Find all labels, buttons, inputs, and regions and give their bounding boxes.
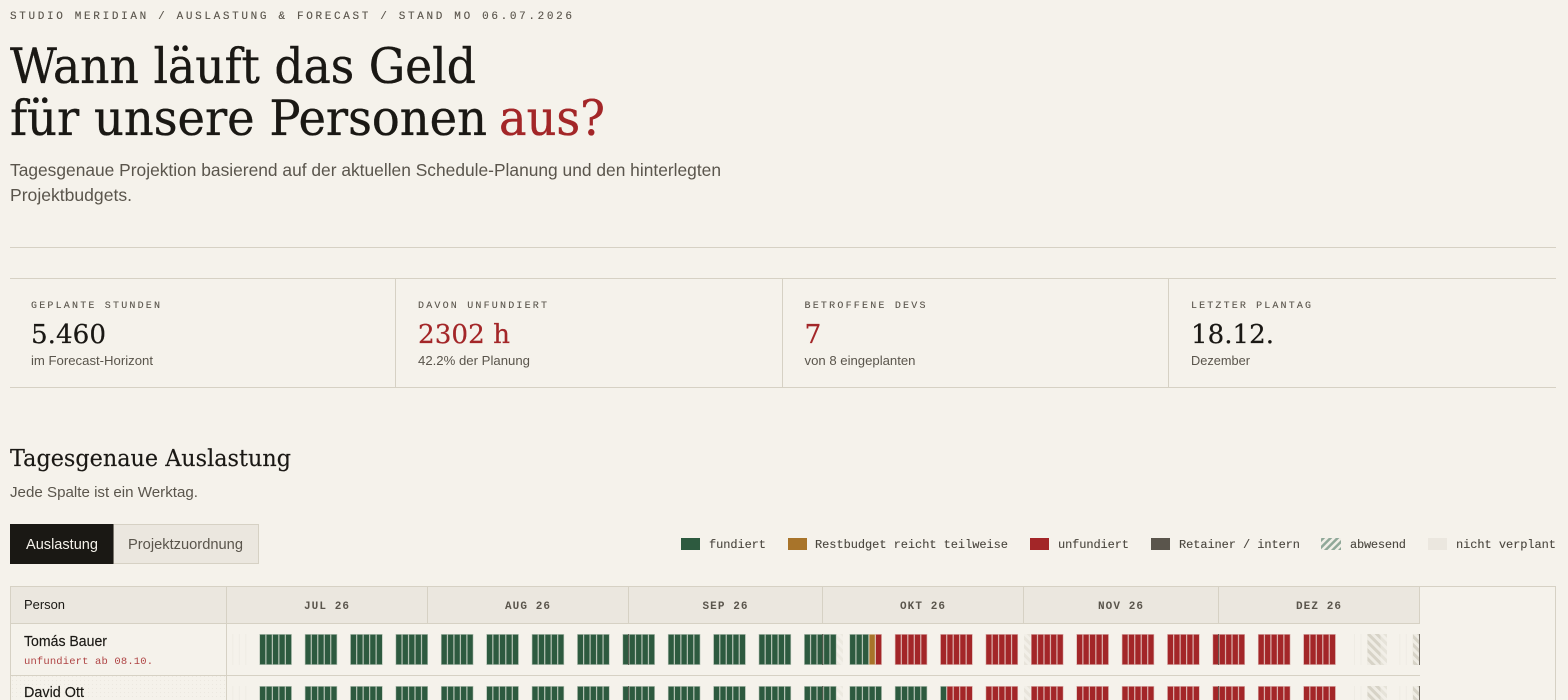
section description: Jede Spalte ist ein Werktag. — [10, 485, 198, 501]
heatmap: Tomás Bauer — [232, 634, 1420, 665]
eyebrow line: STUDIO MERIDIAN / AUSLASTUNG & FORECAST / STAND MO 06.07.2026 — [10, 11, 572, 23]
KPI: davon unfundiert: 2302 h — [418, 319, 510, 350]
KPI: davon unfundiert: 42.2% der Planung — [418, 354, 530, 368]
view tabs: Auslastung — [26, 537, 98, 553]
view tabs — [10, 524, 258, 564]
KPI: geplante Stunden: GEPLANTE STUNDEN — [31, 301, 160, 312]
row: Tomás Bauer — [24, 634, 1420, 668]
KPI: geplante Stunden — [31, 301, 160, 368]
KPI: davon unfundiert: DAVON UNFUNDIERT — [418, 301, 547, 312]
table header: DEZ 26 — [1296, 601, 1341, 613]
table header: Person — [24, 598, 65, 612]
title: für unsere Personen — [10, 91, 487, 147]
section heading: Tagesgenaue Auslastung — [10, 446, 291, 472]
panel: KPI strip — [10, 278, 1556, 388]
legend item: Restbudget: Restbudget reicht teilweise — [815, 538, 1008, 552]
view tabs: Projektzuordnung — [128, 537, 243, 553]
table header: AUG 26 — [505, 601, 550, 613]
subtitle — [10, 160, 721, 205]
table header: OKT 26 — [900, 601, 945, 613]
legend item: abwesend: abwesend — [1350, 538, 1406, 552]
KPI: betroffene Devs: 7 — [804, 319, 821, 350]
legend item: abwesend — [1321, 538, 1406, 552]
KPI: betroffene Devs: von 8 eingeplanten — [804, 354, 916, 368]
subtitle: Tagesgenaue Projektion basierend auf der aktuellen Schedule-Planung und den hinterlegten — [10, 160, 721, 180]
row: David Ott — [11, 676, 1420, 700]
KPI: geplante Stunden: im Forecast-Horizont — [31, 354, 154, 368]
subtitle: Projektbudgets. — [10, 185, 132, 205]
KPI: letzter Plantag: 18.12. — [1191, 319, 1274, 350]
title: Wann läuft das Geld — [10, 39, 476, 95]
KPI: betroffene Devs — [804, 301, 926, 368]
KPI: betroffene Devs: BETROFFENE DEVS — [804, 301, 926, 312]
row: Tomás Bauer: unfundiert ab 08.10. — [24, 656, 153, 668]
KPI: letzter Plantag: LETZTER PLANTAG — [1191, 301, 1311, 312]
table header: NOV 26 — [1098, 601, 1143, 613]
KPI: davon unfundiert — [418, 301, 547, 368]
legend — [681, 538, 1556, 552]
table header: JUL 26 — [304, 601, 349, 613]
legend item: Retainer: Retainer / intern — [1179, 538, 1300, 552]
title — [10, 39, 605, 147]
panel: schedule table — [10, 586, 1556, 700]
legend item: nicht verplant: nicht verplant — [1456, 538, 1556, 552]
legend item: fundiert — [681, 538, 766, 552]
KPI: geplante Stunden: 5.460 — [31, 319, 106, 350]
heatmap: David Ott — [232, 686, 1420, 700]
table header: SEP 26 — [702, 601, 748, 613]
row: Tomás Bauer: Tomás Bauer — [24, 634, 107, 650]
legend item: fundiert: fundiert — [709, 538, 766, 552]
KPI: letzter Plantag: Dezember — [1191, 354, 1250, 368]
KPI: letzter Plantag — [1191, 301, 1311, 368]
legend item: unfundiert: unfundiert — [1058, 538, 1129, 552]
title: aus? — [499, 91, 605, 147]
table header — [11, 587, 1420, 700]
